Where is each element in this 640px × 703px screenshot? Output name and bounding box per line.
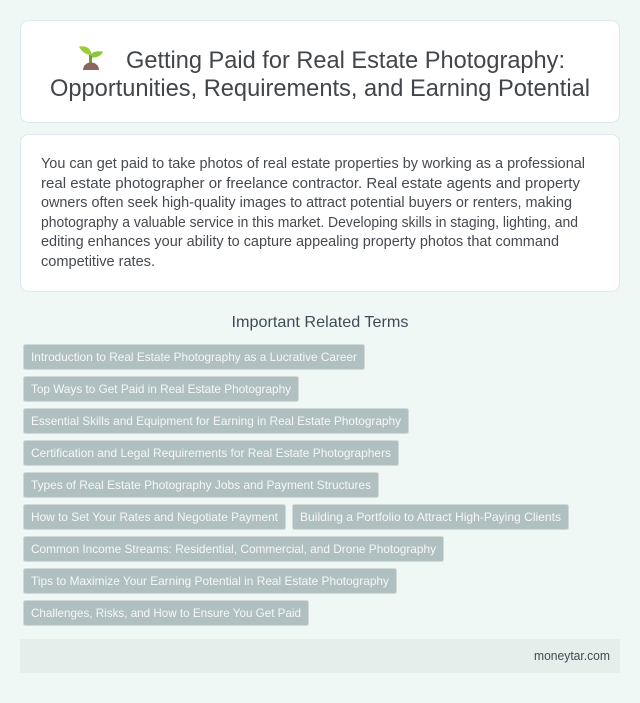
title: Getting Paid for Real Estate Photography:: [126, 47, 565, 74]
tag: skills: Essential Skills and Equipment for Earning in Real Estate Photography: [31, 414, 401, 428]
tag: job types: [24, 472, 378, 498]
tag: skills: [24, 408, 408, 434]
tag: top ways: Top Ways to Get Paid in Real Estate Photography: [31, 382, 291, 396]
title: [50, 47, 590, 102]
tag: introduction: Introduction to Real Estate Photography as a Lucrative Career: [31, 350, 357, 364]
footer: moneytar.com: [534, 648, 610, 663]
text block: intro: real estate photographer or freelance contractor. Real estate agents and property: [41, 176, 581, 192]
icon: seedling: [79, 46, 103, 70]
text block: intro: You can get paid to take photos of real estate properties by working as a professional: [41, 156, 585, 172]
tag: challenges: Challenges, Risks, and How to Ensure You Get Paid: [31, 606, 301, 620]
heading: related terms: Important Related Terms: [232, 314, 408, 331]
title: Opportunities, Requirements, and Earning Potential: [50, 75, 590, 102]
panel: title card: [20, 20, 620, 122]
tag: tips: Tips to Maximize Your Earning Potential in Real Estate Photography: [31, 574, 389, 588]
tag: portfolio: [292, 504, 568, 530]
tag: introduction: [24, 344, 364, 370]
tag list: [24, 344, 568, 626]
tag: top ways: [24, 376, 298, 402]
footer: [20, 639, 620, 673]
tag: certification: [24, 440, 398, 466]
tag: challenges: [24, 600, 308, 626]
text block: intro: photography a valuable service in this market. Developing skills in staging, lighting, and: [41, 215, 578, 231]
text block: intro: [41, 156, 585, 270]
text block: intro: competitive rates.: [41, 254, 155, 270]
tag: income streams: Common Income Streams: Residential, Commercial, and Drone Photography: [31, 542, 436, 556]
tag: job types: Types of Real Estate Photography Jobs and Payment Structures: [31, 478, 371, 492]
tag: rates: How to Set Your Rates and Negotiate Payment: [31, 510, 279, 524]
text block: intro: editing enhances your ability to capture appealing property photos that command: [41, 234, 559, 250]
tag: portfolio: Building a Portfolio to Attract High-Paying Clients: [300, 510, 561, 524]
tag: certification: Certification and Legal Requirements for Real Estate Photographers: [31, 446, 391, 460]
text block: intro: owners often seek high-quality images to attract potential buyers or renters, making: [41, 195, 572, 211]
tag: income streams: [24, 536, 444, 562]
tag: tips: [24, 568, 396, 594]
tag: rates: [24, 504, 286, 530]
panel: intro paragraph: [20, 134, 620, 292]
